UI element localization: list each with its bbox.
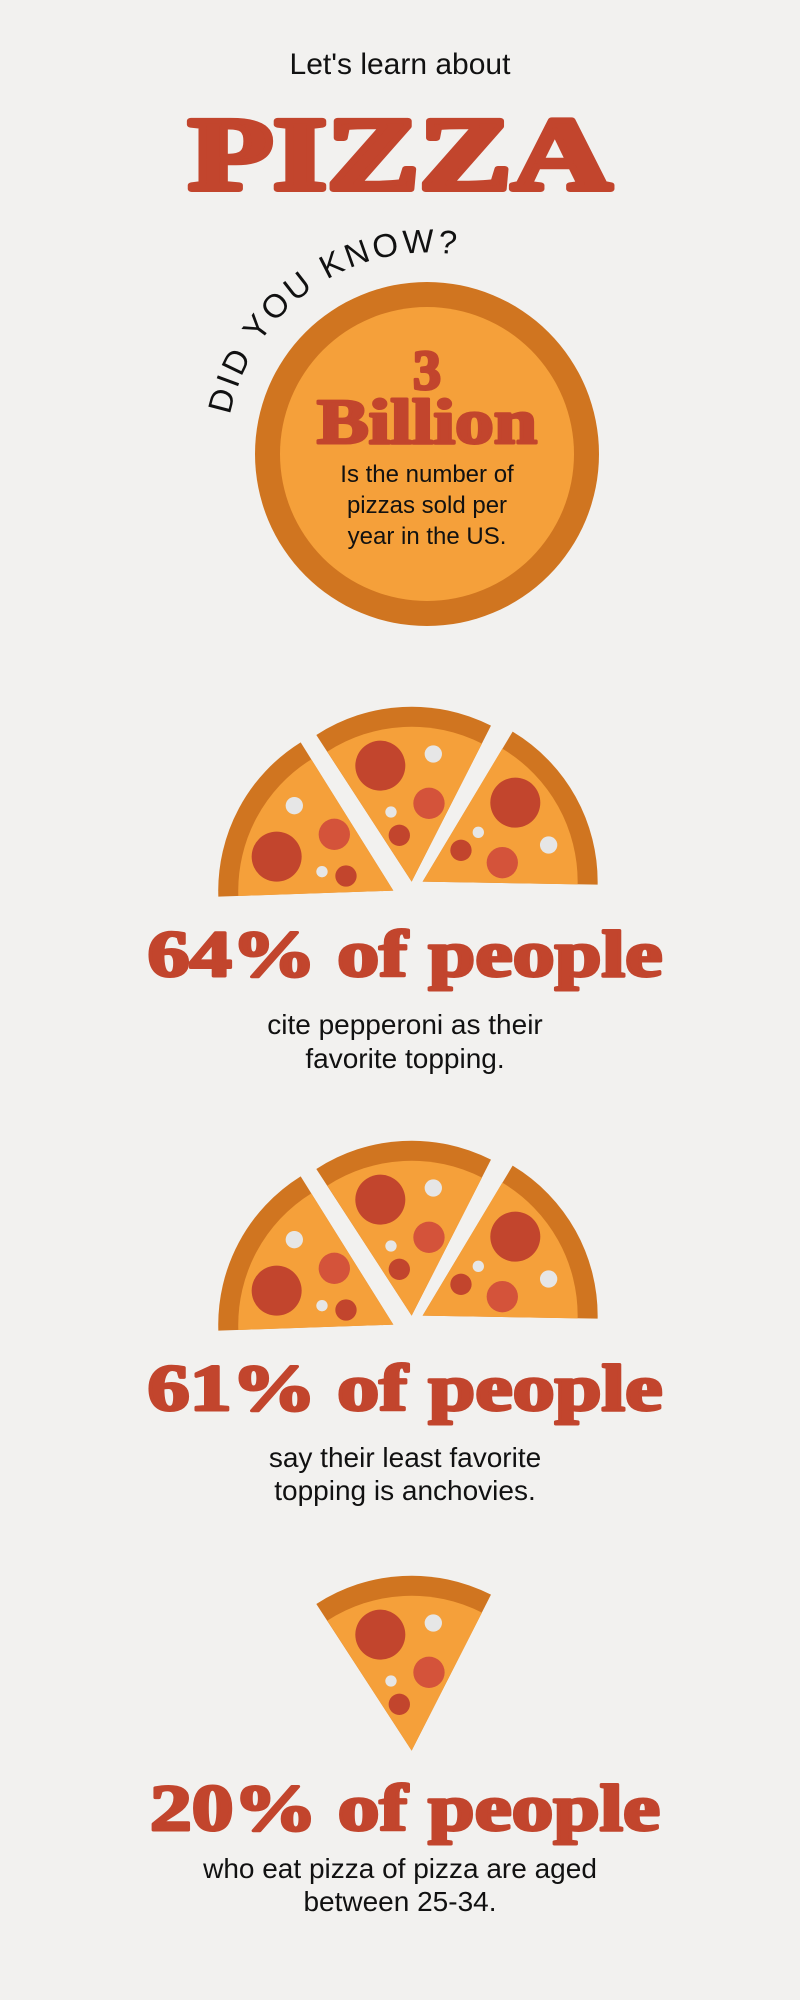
stat text: pepperoni: favorite topping. [305, 1043, 505, 1074]
circle stat: 3 billion: Is the number of [340, 461, 514, 488]
stat text: anchovies [269, 1442, 541, 1506]
stat text: age [202, 1853, 597, 1917]
stat text: age: who eat pizza of pizza are aged [202, 1853, 597, 1884]
circle stat: 3 billion: Billion [317, 386, 537, 457]
icon: pizza slices 2 [218, 1141, 598, 1331]
stat text: pepperoni: cite pepperoni as their [267, 1009, 543, 1040]
circle stat: 3 billion: pizzas sold per [347, 492, 507, 519]
curved heading: did you know: DID YOU KNOW? [208, 229, 456, 412]
icon: single pizza slice [316, 1576, 491, 1751]
stat text: pepperoni [267, 1009, 543, 1074]
title: PIZZA [188, 97, 612, 212]
stat text: anchovies: say their least favorite [269, 1442, 541, 1473]
stat text: anchovies: topping is anchovies. [274, 1475, 536, 1506]
circle stat: 3 billion: 3 [413, 340, 441, 402]
icon: pizza slices 1 [218, 707, 598, 897]
subtitle: Let's learn about [290, 48, 511, 81]
circle stat: 3 billion [255, 282, 599, 626]
stat heading: 64%: 64% of people [148, 918, 662, 991]
stat heading: 20%: 20% of people [150, 1772, 660, 1845]
circle stat: 3 billion: year in the US. [348, 523, 506, 550]
stat text: age: between 25-34. [303, 1886, 497, 1917]
stat heading: 61%: 61% of people [148, 1352, 662, 1425]
